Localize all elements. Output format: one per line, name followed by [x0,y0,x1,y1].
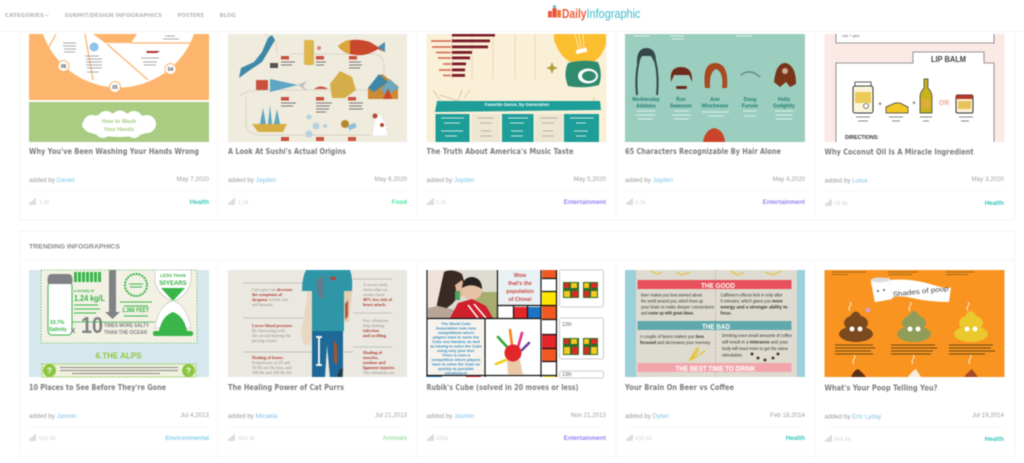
thumbnail: beer vs coffee: focus. [720,310,732,316]
icon: cube cards: 13th [562,372,572,378]
thumbnail: rubik's cube: of China! [508,297,532,303]
callout: left notes: and humans. [252,302,274,307]
thumbnail: characters hair: Swanson [670,104,692,110]
card text: cat purrs: 464.3k [238,436,255,442]
card text: coconut: 18.9k [834,201,848,207]
card text: poop: Jul 19,2014 [972,412,1005,419]
card text: beer: Health [786,435,805,442]
card text: coconut: Health [985,200,1004,207]
card text: coconut: added by Luisa [824,178,868,184]
card text: places: 526.9k [39,436,56,442]
callout: right notes: Purr vibrations [363,318,389,323]
card text: sushi: 1.2k [238,200,249,206]
card text: poop: added by Eric Lyday [824,414,882,420]
card text: music: added by Jayden [426,177,475,184]
callout: cube facts [430,321,483,376]
card text: beer: Your Brain On Beer vs Coffee [624,383,734,392]
card text: coconut: Why Coconut Oil Is A Miracle Ingredient [824,148,974,156]
card text: hair: 65 Characters Recognizable By Hair Alone [625,147,781,156]
thumbnail: places before they are gone: 1.24 kg/L [74,294,105,303]
thumbnail: places before they are gone: x [70,325,76,335]
callout: left notes: Frequencies of 25 and [252,360,291,365]
card text: sushi: A Look At Sushi's Actual Origins [228,147,346,156]
thumbnail: beer vs coffee: Caffeine's effects kick in only after [720,292,783,298]
thumbnail: places before they are gone: 1,388 FEET [122,308,149,314]
card text: places: Environmental [165,435,209,442]
thumbnail: beer vs coffee: the world around you, which frees up [641,298,703,304]
thumbnail: music taste [426,34,606,142]
card text: poop: 364.5k [834,437,851,443]
thumbnail: characters hair: Winchester [702,104,728,110]
callout: left notes: dyspnea in both cats [252,297,288,302]
thumbnail: places before they are gone: THAN THE OCEAN [104,330,147,336]
card text: wash your hands: Why You've Been Washing Your Hands Wrong [29,147,199,156]
thumbnail: cat purrs [228,270,407,377]
thumbnail: wash your hands: 05 [112,85,118,91]
thumbnail: characters hair: Wednesday [632,97,660,103]
thumbnail: music taste: Favorite Genre, by Generation [485,102,550,107]
thumbnail: characters hair: Addams [636,104,656,110]
thumbnail: beer vs coffee: 5 minutes, which gives you more [720,298,783,304]
menu links [5,13,237,19]
card text: places: Jul 4,2013 [180,412,210,419]
callout: left notes: 50 Hz are the best, and [252,365,292,371]
thumbnail: coconut oil: use + jars [842,33,859,38]
card text: sushi: Food [392,199,407,206]
callout: left notes: By interacting with [252,328,286,333]
navigation bar [0,0,1024,32]
thumbnail: beer vs coffee: Beer makes you less worried about [641,292,703,298]
logo [548,6,641,21]
callout: cube facts: Cube one-handed, as well [432,339,480,344]
thumbnail: poop shades [824,270,1004,377]
callout: right notes: muscles, [363,355,378,360]
card text: rubik [426,383,607,442]
thumbnail: beer vs coffee: will result in a tolerance and your [722,340,788,346]
callout: right notes: tendons and [363,360,386,365]
card text: rubik: 435k [436,436,448,442]
card text: beer: added by Dylan [625,413,669,420]
callout: right notes: and swelling. [363,333,387,338]
thumbnail: places before they are gone: 6.THE ALPS [96,352,142,360]
card text: beer: 430.5k [635,436,652,442]
icon: painted hand [496,330,529,375]
thumbnail: characters hair: Holly [778,97,790,103]
callout: right notes: ligament injuries. [363,365,395,370]
card text: wash your hands: Health [190,199,209,206]
card text: poop [824,384,1005,443]
thumbnail: rubik's cube: that's the [508,281,532,287]
thumbnail: places before they are gone [29,270,209,377]
thumbnail: places before they are gone: LESS THAN [160,273,186,278]
thumbnail: wash your hands [29,34,209,142]
card text: cat purrs: The Healing Power of Cat Purrs [228,383,344,392]
thumbnail: beer vs coffee: A couple of beers makes you less [640,334,704,340]
thumbnail: rubik's cube [426,270,606,378]
callout: cube facts: The World Cube [441,321,472,326]
callout: cube facts: using only your feet. [437,348,475,353]
callout: left notes: Cat's purr can decrease [252,287,293,292]
card text: rubik: Rubik's Cube (solved in 20 moves or less) [426,383,578,392]
thumbnail: characters hair: Ron [676,97,686,103]
thumbnail: coconut oil: OR [939,100,949,107]
card text: hair: 3.3k [635,200,646,206]
card text: music: 1.2k [436,200,447,206]
card text: cat purrs: added by Micaela [228,413,278,420]
thumbnail: characters hair: Doug [744,97,756,103]
card text: sushi: added by Jayden [228,177,276,184]
thumbnail: characters hair: Ann [710,97,720,103]
card text: places: added by Jasmin [29,413,77,420]
panel: trending infographics [20,231,1014,456]
thumbnail: places before they are gone: 33.7% [50,320,65,326]
callout: cube facts: blindfolded! [445,370,467,376]
callout: cube facts: have to solve the Cube as [432,362,480,366]
card text: hair [625,147,806,206]
icon: cube cards: 12th [562,322,572,328]
callout: left notes: Healing of bones. [252,355,284,360]
logo: Infographic [586,6,641,21]
callout: right notes [363,282,395,375]
logo: Daily [562,6,587,21]
callout: right notes: Healing of [363,350,383,355]
callout: left notes: the symptoms of [252,292,283,297]
card text: hair: added by Jayden [625,177,673,184]
thumbnail: beer vs coffee: focused and decreases your memory. [640,340,711,346]
thumbnail: beer vs coffee [625,270,805,377]
thumbnail: places before they are gone: 10 [81,312,103,338]
callout: cube facts: players have to solve the [433,334,480,340]
thumbnail: beer vs coffee: stimulation. [722,352,743,358]
card text: places: 10 Places to See Before They're Gone [29,383,166,392]
thumbnail: coconut oil: + [878,101,882,108]
card text: sushi: May 6,2020 [375,176,408,183]
callout: right notes: owners have [363,292,385,297]
callout: cube facts: competition where players [431,357,481,362]
thumbnail: characters hair [625,34,805,142]
thumbnail: characters hair: Funnie [742,104,758,110]
callout: left notes: the cat and hearing the [252,333,291,338]
card text: hair: May 4,2020 [773,176,806,183]
callout: right notes: infection [363,328,380,333]
thumbnail: wash your hands: How to Wash [102,119,137,125]
thumbnail: characters hair: Golightly [773,104,795,110]
card text: coconut [824,148,1005,207]
card text: beer: Feb 18,2014 [770,412,806,419]
callout: cube facts: as having to solve the Cube [430,344,483,348]
callout: cube facts: quickly as possible [438,366,475,371]
callout: left notes [252,287,293,375]
panel: latest infographics [20,20,1014,220]
card text: beer [624,383,806,442]
card text: music: Entertainment [564,199,607,206]
card text: music [426,147,607,206]
card text: coconut: May 3,2020 [972,176,1005,183]
thumbnail: beer vs coffee: energy and a stronger ability to [720,304,788,310]
callout: right notes: The vibrations are [363,370,394,375]
thumbnail: places before they are gone: 50YEARS [159,281,187,287]
thumbnail: rubik's cube: Wow [514,273,527,279]
thumbnail: beer vs coffee: THE BEST TIME TO DRINK [676,364,756,373]
card text: music: The Truth About America's Music Taste [426,147,574,156]
thumbnail: beer vs coffee: THE GOOD [701,281,735,290]
thumbnail: places before they are gone: TIMES MORE SALTY [104,323,149,329]
thumbnail: wash your hands: 06 [61,64,66,70]
card text: rubik: Entertainment [564,435,607,442]
card text: cat purrs: Jul 21,2013 [375,412,408,419]
callout: right notes: shows that cat [363,287,388,292]
callout: left notes: purring sound. [252,338,277,343]
card text: music: May 5,2020 [574,176,607,183]
card text: wash your hands: 1.5k [39,200,50,206]
callout: left notes: 100 Hz and 200 Hz the [252,370,292,375]
thumbnail: coconut oil [824,33,1004,142]
callout: cube facts: There is even a [442,352,471,358]
menu links: SUBMIT/DESIGN INFOGRAPHICS [64,13,162,19]
thumbnail: places before they are gone: a density of [74,289,95,293]
card text: wash your hands [29,147,210,206]
menu links: POSTERS [178,13,204,19]
thumbnail: beer vs coffee: body will need more to get the same [722,346,788,352]
callout: cube facts: Association now runs [436,326,476,330]
callout: right notes: 48% less risk of [363,297,393,302]
thumbnail: sushi origins [228,34,407,142]
thumbnail: coconut oil: DIRECTIONS: [845,135,879,141]
card text: poop: Health [985,436,1004,443]
thumbnail: beer vs coffee: THE BAD [702,322,730,331]
card text: cat purrs: Animals [382,435,407,442]
thumbnail: poop shades: Shades of poop [892,286,949,298]
thumbnail: places before they are gone: Salinity [49,327,67,333]
card text: wash your hands: added by Daniel [29,177,75,184]
card text: hair: Entertainment [763,199,806,206]
heading: trending infographics: TRENDING INFOGRAPHICS [29,244,120,250]
thumbnail: rubik's cube: population [506,289,534,295]
thumbnail: beer vs coffee: your brain to make deeper connections [641,304,715,310]
menu links: CATEGORIES [5,13,44,19]
thumbnail: places before they are gone: ? [186,366,191,376]
card text: rubik: Nov 21,2013 [571,412,607,419]
callout: right notes: help healing [363,323,385,328]
callout: right notes: heart attack. [363,302,386,307]
icon: cube cards [560,270,604,378]
callout: cube facts: competitions where [438,330,475,335]
card text: cat purrs [228,383,408,442]
callout: left notes: Lower blood pressure. [252,323,293,328]
thumbnail: places before they are gone: ? [47,366,52,376]
card text: wash your hands: May 7,2020 [177,176,210,183]
thumbnail: wash your hands: Your Hands [104,127,134,133]
thumbnail: coconut oil: + [912,100,916,107]
thumbnail: beer vs coffee: Drinking even small amounts of coffee [722,333,792,339]
thumbnail: wash your hands: 04 [168,67,173,73]
card text: rubik: added by Jasmin [426,413,475,420]
thumbnail: beer vs coffee: and come up with great ideas. [641,310,694,316]
callout: right notes: A recent study [363,282,389,287]
card text: poop: What's Your Poop Telling You? [824,384,938,392]
card text: places [29,383,210,442]
thumbnail: coconut oil: LIP BALM [931,55,966,64]
card text: sushi [228,147,408,206]
menu links: BLOG [220,13,237,19]
